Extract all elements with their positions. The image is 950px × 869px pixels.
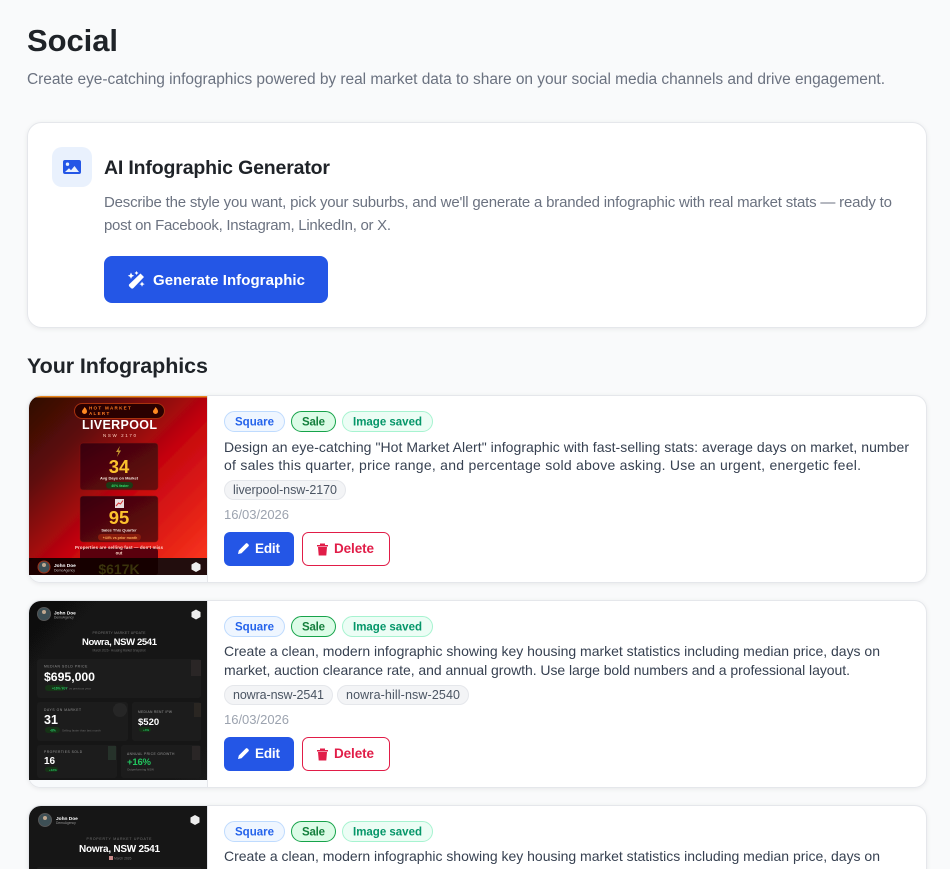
thumbnail: Nowra market update: MEDIAN RENT /PW <box>138 710 173 714</box>
chip: square <box>224 412 284 432</box>
prompt text: Create a clean, modern infographic showing key housing market statistics including median price, days on <box>224 848 880 864</box>
thumbnail: Liverpool hot market alert: LIVERPOOL <box>82 418 157 432</box>
panel: infographic card 3 <box>28 806 926 869</box>
chip: image saved <box>342 822 432 842</box>
button: generate infographic <box>104 256 328 303</box>
panel: infographic card 2 <box>28 600 926 788</box>
thumbnail area <box>29 396 207 582</box>
chip: image saved <box>342 616 432 636</box>
button: delete: Delete <box>334 541 374 556</box>
button: delete: Delete <box>334 746 374 761</box>
chip: sale: Sale <box>302 416 325 428</box>
thumbnail: Nowra market update: +16% YoY <box>52 686 68 690</box>
thumbnail: Liverpool hot market alert: John Doe <box>54 563 76 569</box>
thumbnail: Nowra market update, cropped: DemoAgency <box>56 821 76 825</box>
subtitle: Create eye-catching infographics powered by real market data to share on your social media channels and drive engagement. <box>27 71 885 88</box>
chip: sale <box>292 412 336 432</box>
thumbnail: Liverpool hot market alert: DemoAgency <box>54 568 75 572</box>
thumbnail: Nowra market update: $520 <box>138 717 159 728</box>
thumbnail: Nowra market update, cropped: Nowra, NSW 2541 <box>79 844 160 855</box>
thumbnail: Liverpool hot market alert: 95 <box>109 507 129 528</box>
thumbnail: Liverpool hot market alert: Properties are selling fast — don't miss <box>75 545 164 550</box>
thumbnail: Liverpool hot market alert: 40% faster <box>111 484 129 488</box>
thumbnail area <box>29 601 207 787</box>
chip: square <box>224 822 284 842</box>
chip: location nowra hill: nowra-hill-nsw-2540 <box>346 688 460 702</box>
chip: image saved: Image saved <box>353 826 422 838</box>
chip: square: Square <box>235 622 274 634</box>
thumbnail: Nowra market update: PROPERTY MARKET UPDATE <box>92 631 146 635</box>
chip: square: Square <box>235 826 274 838</box>
section heading: Your Infographics <box>27 354 208 378</box>
thumbnail: Nowra market update, cropped: March 2026 <box>114 856 132 860</box>
thumbnail: Liverpool hot market alert: out <box>116 550 123 556</box>
chip: image saved <box>342 412 432 432</box>
chip: sale <box>292 616 336 636</box>
button: edit <box>224 532 294 566</box>
thumbnail: Nowra market update: MEDIAN SOLD PRICE <box>44 664 88 668</box>
thumbnail: Liverpool hot market alert: Avg Days on Market <box>100 476 139 480</box>
thumbnail: Liverpool hot market alert: ALERT <box>89 411 110 416</box>
chip: sale: Sale <box>302 826 325 838</box>
chip: square: Square <box>235 416 274 428</box>
prompt text <box>224 643 880 678</box>
button: edit: Edit <box>255 541 280 556</box>
thumbnail: Nowra market update: vs previous year <box>69 686 91 690</box>
chip: sale <box>292 822 336 842</box>
thumbnail: Liverpool hot market alert: Sales This Quarter <box>101 528 137 532</box>
chip: square <box>224 616 284 636</box>
thumbnail: Liverpool hot market alert: +44% vs prior month <box>103 536 137 540</box>
date: 16/03/2026 <box>224 712 289 727</box>
heading: AI Infographic Generator <box>104 157 330 179</box>
thumbnail: Nowra market update: -8% <box>50 728 56 732</box>
button: delete <box>302 532 390 566</box>
thumbnail: Liverpool hot market alert <box>29 396 207 577</box>
divider <box>207 396 208 582</box>
chip: location nowra hill <box>338 686 468 704</box>
thumbnail: Nowra market update: +4% <box>143 728 149 732</box>
thumbnail: Nowra market update: Nowra, NSW 2541 <box>82 637 158 648</box>
prompt text: Create a clean, modern infographic showing key housing market statistics including median price, days on <box>224 643 880 659</box>
thumbnail: Nowra market update: DemoAgency <box>54 616 74 620</box>
thumbnail: Nowra market update: $695,000 <box>44 670 95 684</box>
panel: infographic card 1 <box>28 396 926 582</box>
thumbnail: Nowra market update, cropped: PROPERTY MARKET UPDATE <box>86 837 152 841</box>
chip: sale: Sale <box>302 622 325 634</box>
chip: location: liverpool-nsw-2170 <box>233 483 337 497</box>
chip: location <box>224 480 346 500</box>
button: delete <box>302 738 390 770</box>
thumbnail: Nowra market update: March 2026 · Housing Market Snapshot <box>92 648 146 652</box>
thumbnail: Liverpool hot market alert: 34 <box>109 456 130 477</box>
thumbnail: Nowra market update: 31 <box>44 713 58 727</box>
thumbnail: Nowra market update: ANNUAL PRICE GROWTH <box>127 752 175 756</box>
thumbnail: Nowra market update: Selling faster than last month <box>62 728 101 732</box>
thumbnail: Nowra market update: +12% <box>49 768 57 772</box>
thumbnail: Liverpool hot market alert: HOT MARKET <box>89 406 132 410</box>
date: 16/03/2026 <box>224 507 289 522</box>
thumbnail: Nowra market update: John Doe <box>54 610 76 616</box>
description: Describe the style you want, pick your suburbs, and we'll generate a branded infographic with real market stats — ready to <box>104 194 892 211</box>
chip: location nowra <box>224 686 332 704</box>
thumbnail: Nowra market update, cropped <box>29 806 207 869</box>
title: Social <box>27 23 118 58</box>
description <box>104 194 892 234</box>
chip: location nowra: nowra-nsw-2541 <box>233 688 324 702</box>
thumbnail: Nowra market update, cropped: John Doe <box>56 816 78 822</box>
description: post on Facebook, Instagram, LinkedIn, or X. <box>104 217 391 234</box>
divider <box>207 601 208 787</box>
button: edit <box>224 737 294 771</box>
prompt text: of sales this quarter, price range, and percentage sold above asking. Use an urgent, energetic feel. <box>224 457 861 473</box>
thumbnail: Nowra market update: DAYS ON MARKET <box>44 708 82 712</box>
divider <box>207 806 208 869</box>
prompt text: market, auction clearance rate, and annual growth. Use large bold numbers and a professional layout. <box>224 662 850 678</box>
icon: image <box>52 147 92 187</box>
thumbnail: Nowra market update <box>29 601 207 780</box>
thumbnail: Nowra market update: 16 <box>44 756 56 767</box>
thumbnail: Liverpool hot market alert: $617K <box>98 561 140 577</box>
prompt text: Design an eye-catching "Hot Market Alert" infographic with fast-selling stats: average days on market, number <box>224 439 909 455</box>
thumbnail: Nowra market update: Outperforming NSW <box>127 768 154 772</box>
button: generate infographic: Generate Infographic <box>153 272 305 289</box>
thumbnail: Liverpool hot market alert: NSW 2170 <box>103 433 136 438</box>
chip: image saved: Image saved <box>353 622 422 634</box>
prompt text <box>224 439 909 473</box>
chip: image saved: Image saved <box>353 416 422 428</box>
button: edit: Edit <box>255 746 280 761</box>
thumbnail: Nowra market update: +16% <box>127 757 152 768</box>
thumbnail: Nowra market update: PROPERTIES SOLD <box>44 750 83 754</box>
panel: AI infographic generator <box>28 122 926 328</box>
